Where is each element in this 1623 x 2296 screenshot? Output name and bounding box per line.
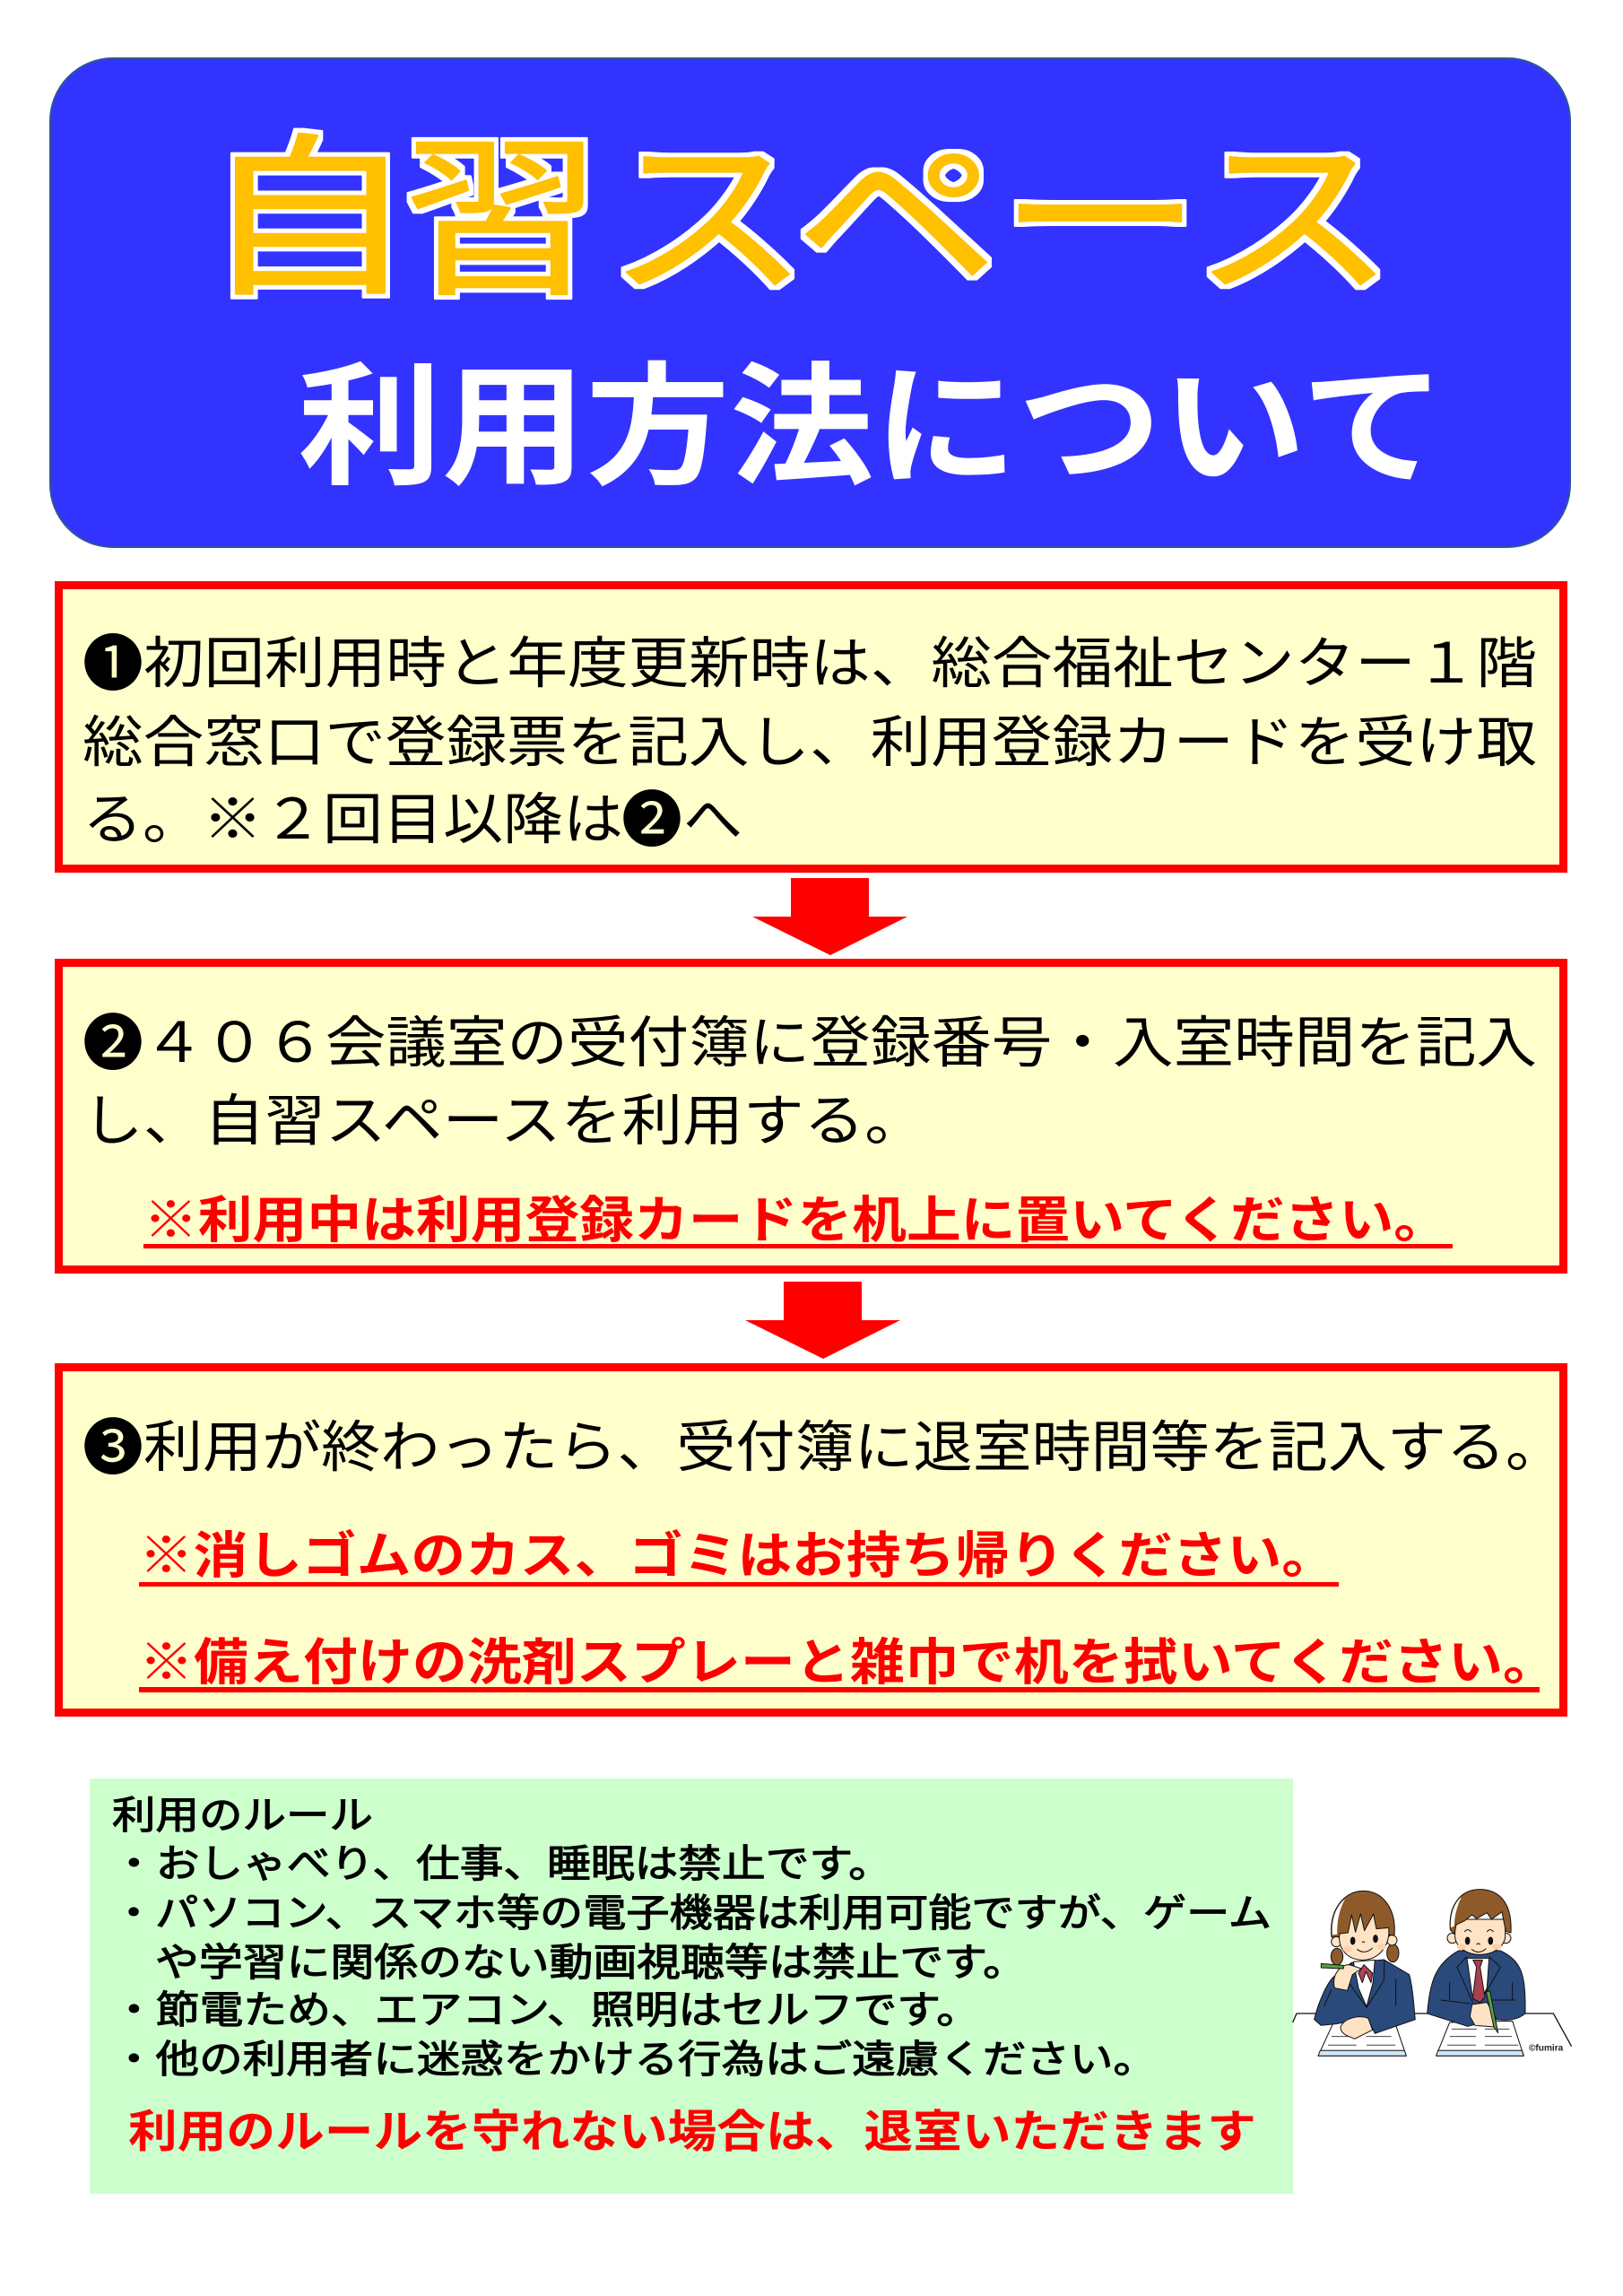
- arrow: step 1 to step 2: [752, 878, 907, 955]
- boy: [1428, 1890, 1525, 2033]
- subtitle: 利用方法について: 利用方法について: [298, 354, 1445, 502]
- rules warning: 利用のルールを守れない場合は、退室いただきます: [128, 2107, 1256, 2157]
- rules heading: 利用のルール: [112, 1795, 373, 1838]
- step 3 text: 利用が終わったら、受付簿に退室時間等を記入する。: [143, 1417, 1565, 1479]
- step 1 text: ❶: [82, 631, 143, 699]
- panel: step 2: [59, 963, 1564, 1270]
- rules list: [112, 1843, 1271, 2082]
- panel: usage rules: [90, 1779, 1293, 2194]
- desk: [1293, 2013, 1572, 2047]
- credit: ©fumira: [1529, 2044, 1564, 2054]
- step 2 box: [59, 963, 1564, 1270]
- title: 自習スペース: スペース: [606, 123, 1395, 317]
- step 1 text: [82, 631, 1537, 855]
- header panel: [50, 58, 1570, 547]
- step 1 text: ❷: [621, 787, 682, 855]
- step 3 warning 1: ※消しゴムのカス、ゴミはお持ち帰りください。: [139, 1527, 1336, 1584]
- rules list: ・おしゃべり、仕事、睡眠は禁止です。: [112, 1843, 892, 1886]
- title: 自習スペース: 自: [201, 123, 416, 317]
- arrow: step 2 to step 3: [745, 1282, 900, 1359]
- rules list: ・節電ため、エアコン、照明はセルフです。: [112, 1989, 980, 2032]
- rules background: [90, 1779, 1293, 2194]
- step 1 box: [59, 585, 1564, 868]
- step 2 text: し、自習スペースを利用する。: [82, 1091, 925, 1152]
- paper: boy: [1436, 2021, 1523, 2056]
- rules list: ・他の利用者に迷惑をかける行為はご遠慮ください。: [112, 2039, 1157, 2082]
- step 1 text: 初回利用時と年度更新時は、総合福祉センター１階: [143, 633, 1537, 695]
- girl: [1315, 1891, 1415, 2039]
- step 3 warning 2: ※備え付けの洗剤スプレーと雑巾で机を拭いてください。: [139, 1634, 1558, 1691]
- paper: girl: [1318, 2015, 1406, 2056]
- panel: step 1: [59, 585, 1564, 868]
- step 1 text: る。※２回目以降は: [82, 789, 623, 851]
- title: 自習スペース: 習: [403, 123, 602, 317]
- illustration: two students studying: [1293, 1890, 1572, 2056]
- step 3 text: ❸: [82, 1414, 143, 1483]
- step 2 text: [82, 1010, 1537, 1152]
- step 2 text: ４０６会議室の受付簿に登録番号・入室時間を記入: [143, 1013, 1537, 1074]
- panel: step 3: [59, 1367, 1565, 1713]
- rules list: や学習に関係のない動画視聴等は禁止です。: [155, 1942, 1027, 1985]
- title: 自習スペース: [201, 123, 1395, 317]
- step 2 warning: ※利用中は利用登録カードを机上に置いてください。: [143, 1192, 1448, 1248]
- step 3 box: [59, 1367, 1564, 1713]
- step 1 text: へ: [683, 789, 742, 851]
- header background: [50, 58, 1570, 547]
- step 1 text: 総合窓口で登録票を記入し、利用登録カードを受け取: [82, 712, 1537, 774]
- rules list: ・パソコン、スマホ等の電子機器は利用可能ですが、ゲーム: [112, 1892, 1271, 1935]
- step 2 text: ❷: [82, 1010, 143, 1078]
